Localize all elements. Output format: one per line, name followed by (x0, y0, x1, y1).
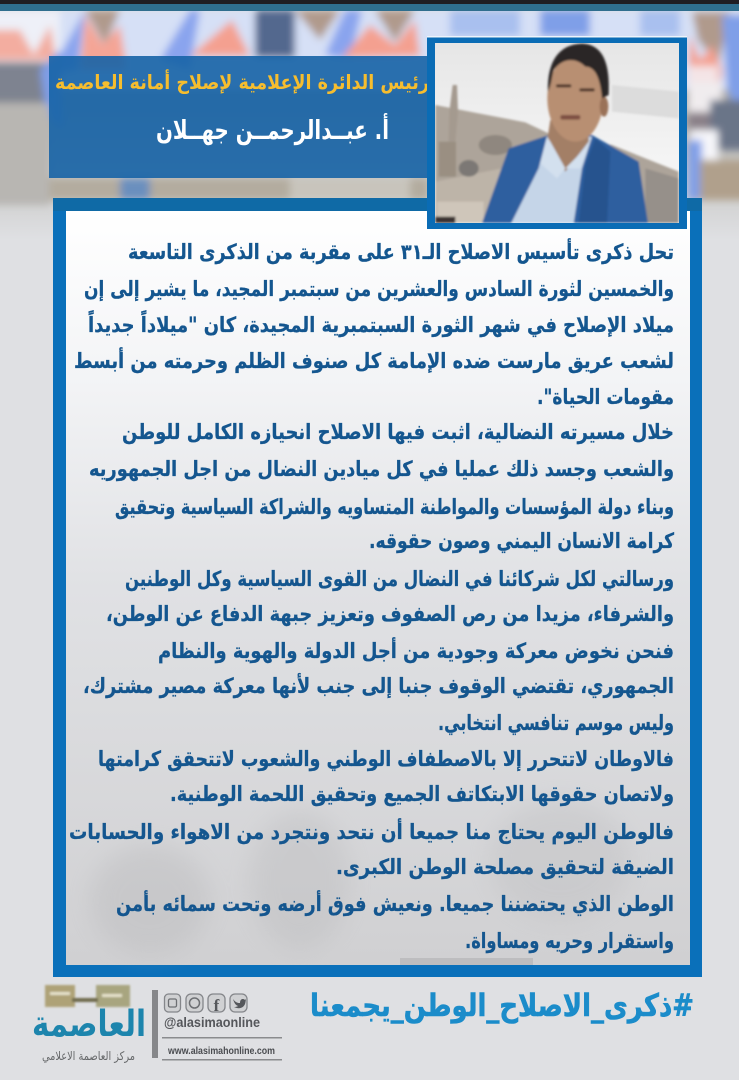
panel: article frame (53, 198, 702, 977)
footer: media centre logo (32, 985, 146, 1064)
paragraph 3: وليس موسم تنافسي انتخابي. (438, 711, 674, 735)
paragraph 6 (116, 889, 674, 953)
paragraph 2: كرامة الانسان اليمني وصون حقوقه. (369, 529, 675, 553)
paragraph 3 (83, 567, 674, 735)
panel: name banner (49, 56, 429, 178)
icon: facebook: f (214, 996, 220, 1015)
logo: buildings (45, 985, 130, 1007)
paragraph 5 (69, 817, 674, 879)
logo: wordmark: العاصمة (32, 1004, 146, 1045)
paragraph 1: تحل ذكرى تأسيس الاصلاح الـ٣١ على مقربة من الذكرى التاسعة (128, 237, 674, 264)
paragraph 4 (98, 747, 674, 806)
paragraph 2 (89, 420, 675, 553)
paragraph 1: مقومات الحياة". (537, 385, 674, 409)
footer: social block (152, 990, 282, 1060)
icon: instagram (164, 994, 180, 1012)
icon: twitter (230, 994, 247, 1012)
logo: subtitle: مركز العاصمة الاعلامي (42, 1049, 135, 1064)
paragraph 6: واستقرار وحريه ومساواة. (465, 929, 674, 953)
website: www.alasimahonline.com (167, 1046, 275, 1057)
icon: whatsapp (186, 994, 203, 1012)
background: blurred flags banner (0, 10, 739, 205)
role title: رئيس الدائرة الإعلامية لإصلاح أمانة العاصمة (55, 68, 429, 94)
photo: portrait (427, 36, 687, 229)
social handle: @alasimaonline (164, 1015, 260, 1030)
author name: أ. عبــدالرحمــن جهــلان (156, 113, 389, 146)
article text (69, 237, 675, 953)
paragraph 1 (74, 237, 674, 409)
paragraph 5: الضيقة لتحقيق مصلحة الوطن الكبرى. (336, 855, 674, 879)
background: top dark strip (0, 0, 739, 11)
